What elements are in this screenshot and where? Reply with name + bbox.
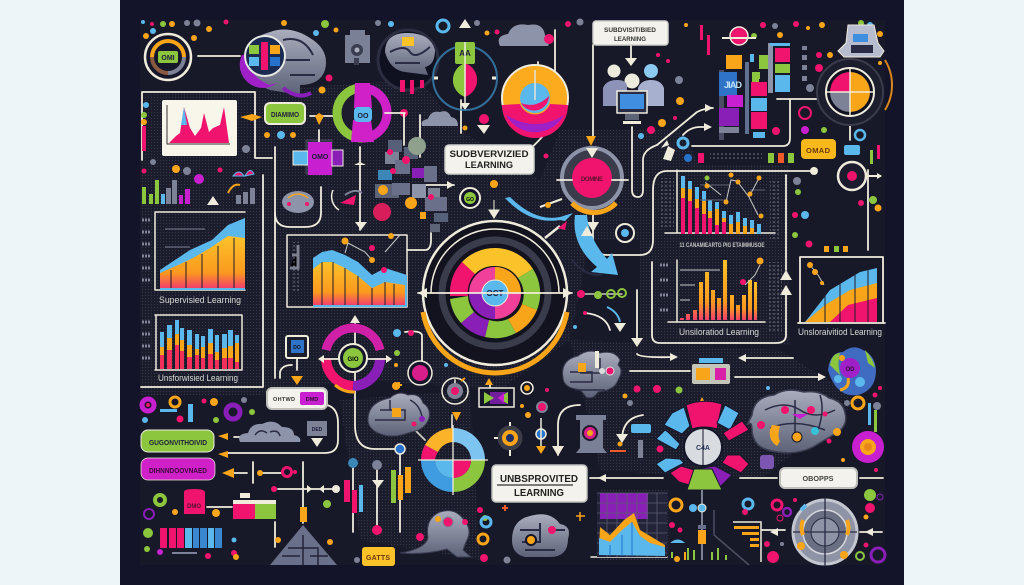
icon: gray machine	[576, 415, 607, 453]
caption: unsupervised learning right: Unsloraivitiod Learning	[798, 327, 882, 338]
icon: top-left ring badge	[145, 34, 191, 80]
icon: orbit target	[442, 378, 493, 421]
callout: unsupervised learning heading	[492, 465, 587, 502]
label: two-tone pill: OHTWD	[273, 397, 295, 403]
label: orange button	[801, 139, 836, 159]
icon: pink tab and stacked blocks	[184, 489, 276, 519]
icon: blue box with arrow: DO	[293, 345, 301, 351]
icon: small blue capsule connector	[610, 424, 651, 458]
icon: brain centre	[368, 393, 429, 436]
chart: right lower bars	[660, 258, 782, 332]
icon: small ring target	[616, 224, 634, 242]
icon: magenta button	[852, 431, 884, 463]
icon: top-left ring badge: OMI	[161, 55, 175, 62]
chart: segmented wheel right	[656, 401, 749, 490]
icon: small brain	[282, 191, 314, 213]
chart: segmented wheel right: C4A	[696, 445, 710, 452]
icon: colorful blob: OD	[846, 367, 855, 373]
icon: cloud centre	[422, 111, 458, 126]
chart: small bar chart	[142, 180, 190, 204]
icon: magenta puzzle piece: OMO	[312, 154, 329, 161]
icon: cloud top	[499, 24, 549, 46]
icon: pink hub circle	[557, 136, 628, 213]
chart: concentric arcs target: GIO	[347, 357, 359, 363]
caption: supervised learning: Supervisied Learning	[159, 295, 241, 306]
label: two-tone pill	[267, 388, 327, 409]
icon: cloud left	[239, 421, 327, 447]
label: magenta pill: DIHNNDOOVNAED	[149, 468, 207, 475]
chart: main segmented wheel: OCT	[487, 289, 504, 298]
callout: unsupervised learning heading: UNBSPROVITED	[500, 474, 578, 485]
chart: middle area chart	[290, 233, 407, 307]
icon: magenta puzzle piece	[293, 140, 343, 175]
icon: small decorative dots	[141, 18, 885, 564]
label: magenta pill	[141, 458, 215, 480]
icon: pink hub circle: DOMINE	[581, 177, 603, 183]
icon: brain bottom two	[512, 514, 569, 557]
callout: supervised learning heading	[445, 145, 534, 174]
chart: four-part donut	[418, 425, 488, 495]
icon: lower tall connector	[670, 490, 749, 565]
icon: dial control	[793, 498, 857, 566]
icon: pyramid	[270, 507, 337, 565]
panel: peak chart	[162, 100, 237, 156]
arrows into pills	[218, 433, 234, 478]
chart: area chart left	[142, 218, 245, 290]
icon: brain with globe	[240, 30, 326, 96]
label: green pill	[141, 430, 214, 452]
callout: unsupervised learning heading: LEARNING	[514, 488, 564, 499]
chart: bar chart left	[142, 320, 239, 369]
icon: gray device	[345, 30, 370, 65]
chart: stacked block columns: JIAD	[724, 80, 742, 90]
arrow: curved ribbons into hub	[505, 197, 618, 275]
callout: supervised learning heading: SUDBVERVIZIED	[450, 149, 529, 159]
label: orange button: OMAD	[806, 146, 831, 155]
icon: brain with dark ring	[378, 30, 438, 94]
icon: ring target right	[810, 145, 882, 190]
chart: color bars bottom left	[160, 528, 222, 548]
icon: block cluster	[373, 137, 448, 232]
callout: top learning label: LEARNING	[614, 36, 646, 43]
label: green diamond pill: DIAMIMO	[271, 112, 299, 119]
chart: quartered circle	[817, 59, 892, 125]
label: orange gates tag: GATTS	[366, 555, 390, 562]
chart: right area chart	[805, 262, 877, 322]
icon: infinity tile	[479, 388, 514, 407]
icon: lens top	[684, 23, 756, 55]
chart: main segmented wheel	[418, 221, 572, 373]
connector lines and arrows	[141, 30, 885, 557]
icon: people and monitor	[603, 64, 664, 124]
callout: top learning label: SUBDVISIT/BIED	[604, 27, 656, 34]
caption: right top chart: 11 CANAMIEARTG PIG ETAIMMUSOE	[680, 242, 765, 249]
chart: right top bars with dots	[660, 172, 780, 240]
chart: small gray bars with fan	[218, 168, 255, 204]
callout: supervised learning heading: LEARNING	[465, 160, 513, 170]
callout: top learning label	[593, 21, 668, 45]
label: green diamond pill	[265, 103, 305, 124]
icon: blue box with arrow	[286, 336, 308, 385]
chart: concentric arcs target	[318, 328, 392, 392]
chart: grid area chart	[597, 493, 667, 557]
icon: brain right of main wheel	[563, 351, 621, 398]
icon: green ring button: GO	[466, 197, 474, 203]
label: two-tone pill: DMD	[306, 397, 318, 403]
chart: orange step bars	[733, 522, 761, 562]
icon: split circle with green tab	[433, 42, 497, 110]
chart: top donut pie	[502, 65, 568, 138]
brain beside pie	[544, 34, 554, 44]
icon: green and magenta target	[333, 83, 405, 145]
icon: brain bottom one	[400, 511, 471, 557]
caption: unsupervised learning left: Unsforwisied Learning	[158, 373, 238, 384]
icon: pink tab and stacked blocks: DMO	[187, 504, 201, 510]
icon: swoosh	[332, 190, 362, 210]
label: operations pill: OBOPPS	[802, 476, 834, 483]
label: orange gates tag	[362, 547, 395, 566]
chart: stacked block columns	[719, 43, 807, 140]
icon: eye gear	[494, 418, 546, 456]
icon: robot badge	[838, 25, 884, 57]
icon: green ring button	[460, 188, 499, 218]
icon: split circle with green tab: AA	[459, 49, 471, 58]
label: operations pill	[780, 468, 857, 488]
icon: colorful blob	[828, 347, 876, 395]
icon: green and magenta target: OO	[358, 113, 369, 120]
icon: cloud left: DED	[312, 427, 323, 433]
icon: orange marker	[240, 113, 324, 125]
icon: large brain right	[747, 390, 846, 453]
icon: pink orb	[408, 361, 432, 385]
chart: candlesticks	[344, 467, 411, 513]
label: green pill: GUGONVITHOIVID	[149, 440, 207, 447]
caption: unsupervised learning centre: Unsiloratiod Learning	[679, 327, 759, 338]
arrowheads	[207, 19, 873, 536]
icon: two-square box	[692, 358, 730, 407]
dark poster panel	[120, 0, 904, 585]
